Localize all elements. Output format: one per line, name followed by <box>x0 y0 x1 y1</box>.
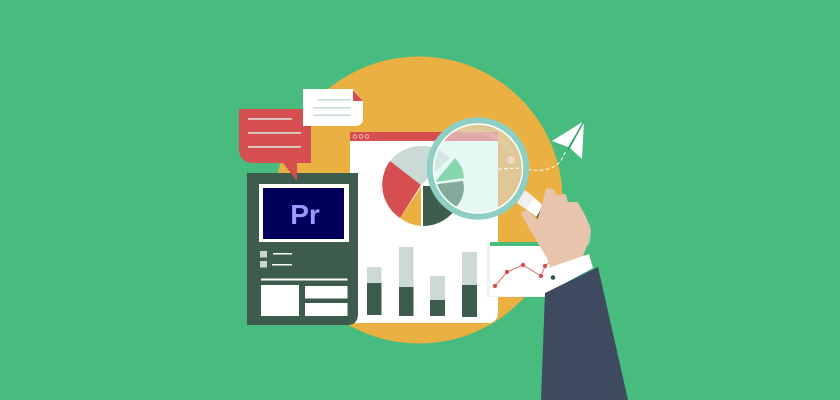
speech bubble <box>239 109 311 181</box>
premiere pro brochure <box>247 173 358 325</box>
document header bar <box>350 132 498 141</box>
content blocks <box>261 278 348 316</box>
list items <box>260 251 292 268</box>
teal watch sliver <box>583 222 591 246</box>
logo frame <box>259 184 349 242</box>
premiere logo <box>263 188 344 239</box>
magnified grey slice <box>437 181 464 206</box>
magnifier rim <box>430 120 526 216</box>
highlighted pie slice <box>435 158 464 182</box>
cuff button <box>551 275 555 280</box>
infographic illustration <box>239 56 628 400</box>
bar chart <box>367 247 477 317</box>
line chart <box>495 262 550 286</box>
pie chart <box>382 146 463 226</box>
report document <box>350 132 498 323</box>
lens glare <box>463 132 512 152</box>
note card <box>303 89 363 126</box>
dashed flight path <box>528 151 566 170</box>
hand <box>522 189 590 268</box>
magnifier handle <box>517 190 545 218</box>
orange circle <box>276 56 562 344</box>
small line chart card <box>487 242 550 297</box>
window dots <box>353 135 369 138</box>
paper plane <box>552 121 584 159</box>
suit sleeve <box>541 267 628 400</box>
shirt cuff <box>545 254 593 294</box>
premiere logo: Pr <box>290 199 320 230</box>
magnifier lens contents <box>434 124 522 212</box>
